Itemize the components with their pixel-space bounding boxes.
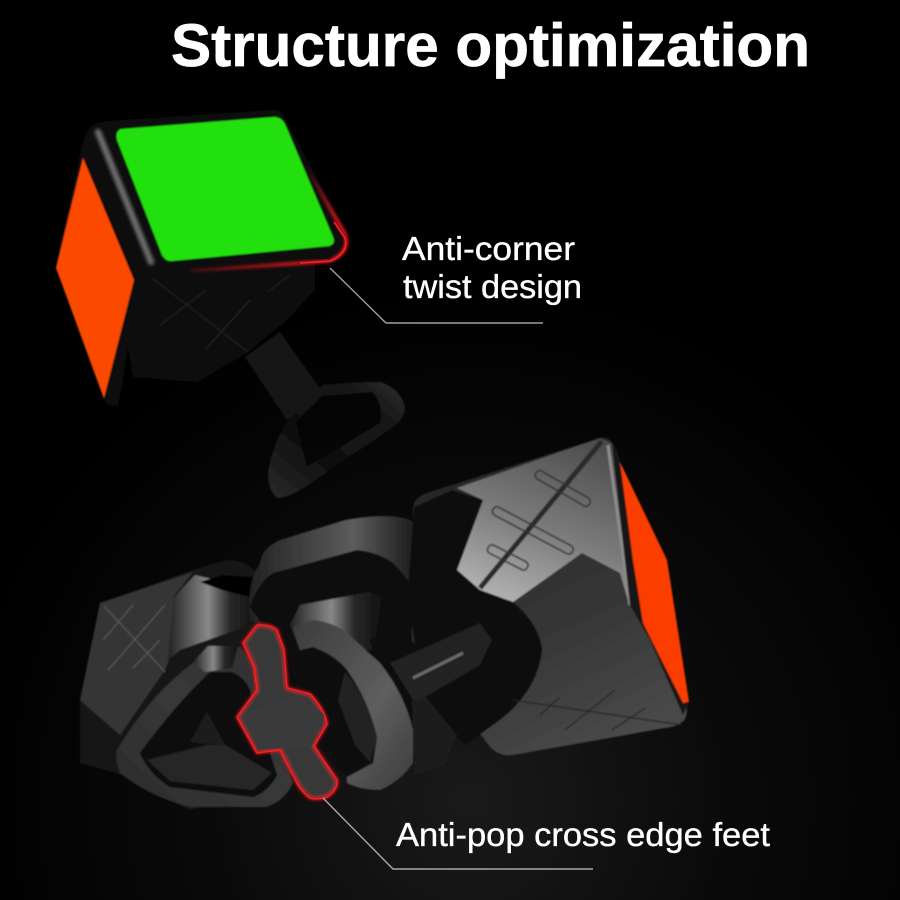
label: anti-corner bbox=[402, 230, 582, 305]
axle bbox=[390, 623, 492, 700]
right ring inner bbox=[287, 647, 377, 777]
rear lower blob bbox=[412, 690, 462, 775]
title: Structure optimization bbox=[171, 12, 810, 79]
right orange sticker bbox=[620, 462, 689, 703]
label: anti-pop: Anti-pop cross edge feet bbox=[396, 816, 770, 853]
right cubie edge highlight bbox=[608, 445, 630, 605]
corner highlight strip bbox=[98, 132, 151, 262]
leader line: corner bbox=[330, 268, 543, 323]
left funnel bbox=[168, 575, 257, 660]
rear dark mass bbox=[370, 490, 470, 770]
right cubie centre groove bbox=[480, 441, 602, 588]
cross crest bbox=[243, 695, 325, 750]
right cubie pocket bbox=[408, 490, 542, 745]
foot highlight bbox=[193, 646, 238, 672]
left cubie grooves bbox=[103, 605, 165, 672]
green sticker bbox=[116, 117, 334, 261]
right cubie upper face bbox=[457, 438, 630, 607]
right ring bbox=[287, 620, 413, 790]
left opening bbox=[200, 575, 256, 598]
corner stem bbox=[245, 332, 323, 420]
right cubie bbox=[412, 438, 687, 755]
right cubie frame bbox=[612, 445, 688, 715]
corner body marks bbox=[152, 275, 290, 352]
cross glow outline bbox=[237, 625, 337, 799]
cross bright outline bbox=[237, 625, 337, 799]
leader line: edge bbox=[323, 798, 593, 869]
orange sticker bbox=[56, 158, 134, 398]
corner red highlight bbox=[190, 165, 346, 271]
left cubie top face bbox=[80, 572, 193, 735]
triangular foot bbox=[116, 647, 293, 807]
edge and corner assembly bbox=[80, 438, 689, 810]
upper arc funnel bbox=[290, 592, 382, 650]
corner frame bbox=[56, 110, 346, 406]
upper arc inner shadow bbox=[250, 550, 424, 650]
right cubie lower marks bbox=[512, 690, 682, 730]
left cubie bbox=[80, 560, 290, 810]
label: anti-corner: Anti-corner bbox=[402, 230, 575, 267]
corner body underside bbox=[120, 262, 315, 382]
triangular foot centre bbox=[190, 712, 225, 745]
right ring inner wall bbox=[338, 672, 377, 762]
red cross foot bbox=[237, 625, 337, 799]
corner cubie bbox=[56, 110, 405, 498]
axle highlight bbox=[413, 653, 463, 678]
corner foot loop bbox=[268, 382, 405, 498]
upper arc bbox=[249, 516, 424, 640]
label: anti-corner: twist design bbox=[403, 268, 582, 305]
right cubie slots bbox=[486, 469, 592, 571]
triangular foot lower facet bbox=[147, 745, 272, 790]
triangular foot cavity bbox=[140, 672, 277, 797]
